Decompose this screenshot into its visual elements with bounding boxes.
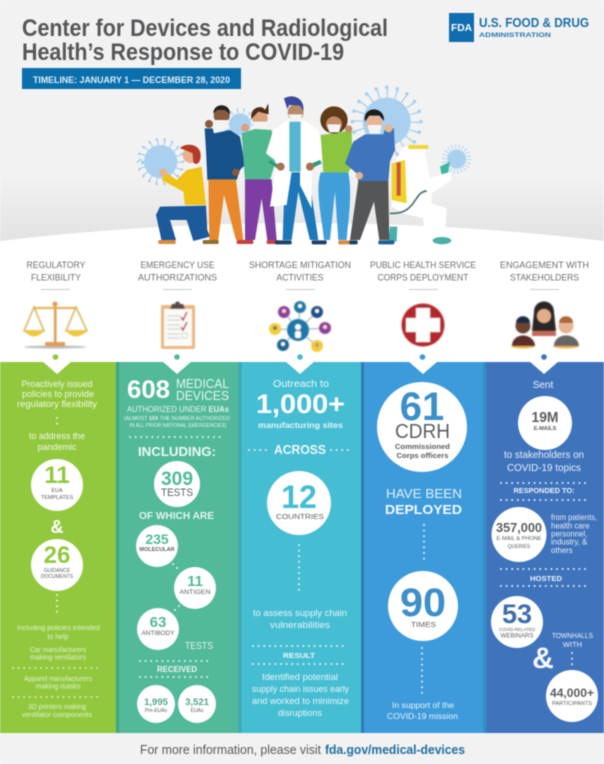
heading: emergency use authorizations (138, 260, 217, 290)
outreach: Outreach to (273, 379, 329, 390)
figure: doctor in white coat (266, 96, 327, 244)
stat: 90 times: 90 (400, 581, 446, 625)
from patients text: from patients, (551, 513, 597, 522)
result text: disruptions (278, 708, 322, 719)
dots (56, 595, 58, 616)
panel: emergency use authorizations (116, 354, 238, 733)
notch and dot (408, 354, 438, 374)
icon: stakeholders (511, 302, 579, 348)
result: RESULT (283, 651, 315, 660)
heading: public health service corps deployment: CORPS DEPLOYMENT (378, 272, 469, 282)
stat: 3,521 EUAs: EUAs (191, 708, 204, 714)
policy list: Car manufacturers (30, 647, 86, 654)
icon: network of people (269, 301, 331, 352)
stat: 11 EUA templates: 11 (44, 462, 70, 489)
stat: 11 EUA templates: TEMPLATES (41, 495, 73, 501)
stat: 53 webinars: COVID-RELATED (499, 627, 536, 632)
responded to (501, 483, 589, 500)
from patients text (551, 513, 597, 555)
townhalls with: TOWNHALLS (552, 631, 593, 640)
stat: 63 antibody: 63 (150, 614, 166, 631)
townhalls with: WITH (563, 640, 582, 649)
stakeholders text (504, 450, 584, 474)
policy list: ventilator components (22, 712, 93, 719)
of which are: OF WHICH ARE (139, 511, 214, 522)
stat: 1,995 pre-EUAs: 1,995 (144, 697, 169, 708)
stat: 44,000+ participants (546, 670, 598, 722)
stat: 26 guidance documents: 26 (44, 542, 70, 569)
stat: 44,000+ participants: PARTICIPANTS (552, 701, 593, 707)
dots (56, 418, 58, 425)
panel: public health service corps deployment (361, 354, 483, 733)
FDA logo (449, 13, 589, 42)
heading: regulatory flexibility: REGULATORY (26, 260, 86, 270)
stat: 309 tests (154, 461, 200, 507)
in support text: In support of the (392, 700, 454, 710)
figure: worker in blue and grey (345, 109, 395, 244)
stat: 61 CDRH officers: Commissioned (395, 442, 450, 451)
stat: 11 antigen: 11 (187, 573, 203, 590)
virus: left (138, 139, 183, 184)
heading: shortage mitigation activities: ACTIVITIES (276, 272, 324, 282)
have been deployed: HAVE BEEN (386, 486, 462, 501)
608 medical devices: 608 (127, 376, 170, 404)
heading: emergency use authorizations: AUTHORIZATIONS (138, 272, 217, 282)
result (253, 646, 348, 664)
608 medical devices: AUTHORIZED UNDER EUAs (127, 405, 230, 414)
notch and dot (42, 354, 72, 374)
dots (298, 545, 300, 594)
assess text (253, 608, 347, 631)
stat: 12 countries: COUNTRIES (276, 512, 324, 521)
footer: fda.gov/medical-devices (325, 742, 465, 757)
outreach: manufacturing sites (258, 420, 343, 430)
stat: 61 CDRH officers: CDRH (395, 421, 450, 443)
icon: clipboard (161, 302, 195, 349)
stat: 26 guidance documents (31, 539, 83, 591)
received: RECEIVED (157, 665, 197, 674)
608 medical devices: (ALMOST 10X THE NUMBER AUTHORIZED (124, 416, 230, 422)
stat: 19M emails: E-MAILS (534, 426, 557, 432)
townhalls with (552, 631, 593, 665)
stat: 235 molecular (136, 525, 178, 567)
policy list (13, 625, 102, 719)
intro text: pandemic (38, 442, 77, 453)
timeline banner (22, 68, 241, 89)
stat: 309 tests: TESTS (161, 487, 193, 499)
figure: kneeling worker in yellow (156, 145, 218, 244)
stat: 11 antigen: ANTIGEN (180, 589, 211, 596)
virus: far right (445, 147, 469, 171)
in support text: COVID-19 mission (387, 711, 458, 721)
timeline banner: TIMELINE: JANUARY 1 — DECEMBER 28, 2020 (33, 75, 230, 86)
dots (421, 648, 423, 693)
from patients text: others (551, 546, 573, 555)
heading: engagement with stakeholders: STAKEHOLDERS (510, 272, 579, 282)
stat: 53 webinars (491, 596, 543, 648)
virus: small behind worker (226, 110, 254, 138)
heading: public health service corps deployment: PUBLIC HEALTH SERVICE (370, 260, 476, 270)
policy list: 3D printers making (28, 704, 86, 711)
FDA logo: U.S. FOOD & DRUG (479, 15, 589, 30)
policy list: making masks (36, 684, 81, 690)
stat: 309 tests: 309 (161, 469, 193, 490)
stat: 63 antibody: ANTIBODY (142, 631, 174, 637)
result text: supply chain issues early (252, 684, 349, 695)
heading: engagement with stakeholders: ENGAGEMENT WITH (500, 260, 589, 270)
stat: 3,521 EUAs: 3,521 (185, 697, 210, 708)
policy list: Apparel manufacturers (24, 676, 92, 683)
stat: 235 molecular: 235 (145, 531, 169, 547)
outreach: 1,000+ (256, 389, 345, 419)
stat: 357,000 queries: E-MAIL & PHONE (496, 536, 542, 542)
stakeholders text: to stakeholders on (504, 450, 584, 461)
figure: worker in navy and orange (203, 105, 245, 244)
heading: public health service corps deployment (370, 260, 476, 290)
stat: 357,000 queries (492, 507, 546, 562)
have been deployed (385, 486, 462, 517)
ampersand: & (50, 517, 64, 537)
sent: Sent (533, 380, 554, 391)
stat: 357,000 queries: QUERIES (508, 544, 531, 550)
stat: 61 CDRH officers (377, 382, 467, 472)
connector dots (173, 564, 179, 610)
icon: red cross (402, 304, 444, 346)
608 medical devices: IN ALL PRIOR NATIONAL EMERGENCIES) (130, 423, 227, 429)
intro text (17, 379, 97, 453)
stat: 357,000 queries: 357,000 (496, 520, 542, 535)
FDA logo: ADMINISTRATION (479, 32, 551, 39)
across: ACROSS (274, 442, 326, 457)
FDA logo: FDA (451, 23, 472, 34)
notch and dot (285, 354, 315, 374)
stat: 61 CDRH officers: 61 (400, 385, 444, 429)
stat: 53 webinars: WEBINARS (500, 632, 534, 640)
heading: engagement with stakeholders (500, 260, 589, 290)
608 medical devices: MEDICAL (176, 376, 229, 391)
intro text: Proactively issued (22, 379, 92, 390)
policy list: making ventilators (30, 654, 86, 662)
notch and dot (529, 354, 559, 374)
outreach (256, 379, 345, 430)
assess text: to assess supply chain (253, 608, 347, 619)
stat: 12 countries (267, 471, 331, 535)
title (22, 15, 388, 66)
policy list: Including policies intended (17, 625, 100, 632)
from patients text: personnel, (551, 530, 587, 538)
intro text: policies to provide (22, 389, 94, 400)
stakeholders text: COVID-19 topics (507, 463, 581, 474)
stat: 90 times: TIMES (411, 620, 436, 629)
from patients text: health care (551, 522, 590, 530)
intro text: to address the (29, 431, 85, 442)
panel: engagement with stakeholders (483, 354, 604, 733)
panel: shortage mitigation activities (238, 354, 361, 733)
stat: 19M emails: 19M (532, 409, 558, 426)
hosted (501, 569, 589, 586)
stat: 44,000+ participants: 44,000+ (550, 686, 594, 700)
across (249, 442, 351, 457)
result text (252, 672, 349, 719)
stat: 1,995 pre-EUAs (137, 685, 175, 723)
stat: 11 EUA templates: EUA (51, 488, 63, 494)
heading: emergency use authorizations: EMERGENCY USE (140, 260, 214, 270)
from patients text: industry, & (551, 538, 588, 546)
in support text (387, 700, 458, 721)
received (140, 661, 212, 677)
figure: worker in green and purple (237, 103, 278, 244)
608 medical devices: DEVICES (176, 388, 229, 403)
608 medical devices (124, 376, 230, 429)
tests label: TESTS (185, 641, 213, 652)
stat: 63 antibody (137, 608, 179, 650)
stat: 11 antigen (174, 567, 216, 609)
icon: scales of justice (24, 302, 87, 348)
assess text: vulnerabilities (270, 620, 330, 631)
stat: 235 molecular: MOLECULAR (139, 547, 175, 553)
title: Health’s Response to COVID-19 (22, 39, 344, 66)
notch and dot (162, 354, 192, 374)
including: INCLUDING: (138, 444, 216, 459)
heading: shortage mitigation activities: SHORTAGE MITIGATION (249, 260, 351, 270)
figure: hazmat worker (388, 145, 452, 244)
stat: 19M emails (518, 396, 572, 450)
figure: worker in lime and blue (318, 106, 353, 244)
stat: 53 webinars: 53 (502, 599, 532, 629)
footer: For more information, please visit (140, 742, 321, 757)
stat: 26 guidance documents: GUIDANCE (44, 568, 71, 574)
stat: 1,995 pre-EUAs: Pre-EUAs (145, 708, 168, 714)
virus: large right (352, 87, 421, 156)
panel: regulatory flexibility (0, 354, 116, 733)
stat: 90 times (388, 571, 458, 641)
stat: 11 EUA templates (31, 459, 83, 511)
responded to: RESPONDED TO: (514, 488, 574, 495)
have been deployed: DEPLOYED (385, 502, 462, 517)
stat: 61 CDRH officers: Corps officers (396, 451, 448, 460)
stat: 3,521 EUAs (178, 685, 216, 723)
intro text: regulatory flexibility (17, 399, 97, 410)
stat: 26 guidance documents: DOCUMENTS (41, 574, 74, 580)
heading: shortage mitigation activities (249, 260, 351, 290)
dots (130, 436, 225, 438)
result text: and worked to minimize (252, 696, 349, 707)
illustration: healthcare workers and viruses (138, 87, 469, 244)
policy list: to help (47, 634, 69, 641)
ampersand: & (532, 642, 554, 675)
footer (0, 733, 604, 764)
stat: 12 countries: 12 (281, 479, 317, 515)
heading: regulatory flexibility (26, 260, 86, 290)
result text: Identified potential (262, 672, 338, 683)
hosted: HOSTED (530, 574, 563, 583)
title: Center for Devices and Radiological (22, 15, 388, 42)
dots (423, 525, 425, 563)
heading: regulatory flexibility: FLEXIBILITY (31, 272, 81, 282)
